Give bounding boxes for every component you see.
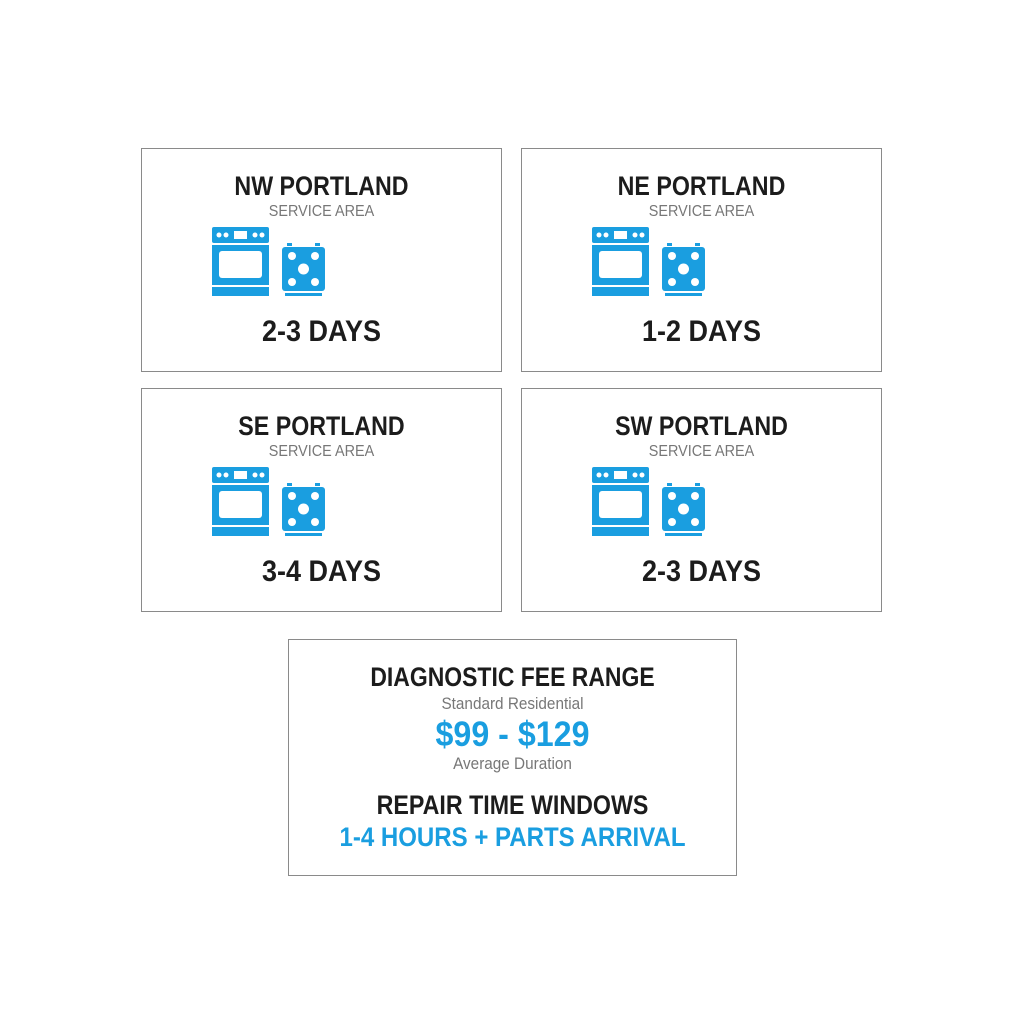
heading: NW PORTLAND (234, 171, 409, 201)
duration label: Average Duration (453, 754, 572, 773)
card: NE Portland (521, 148, 882, 372)
icon: stove and cooktop (212, 467, 325, 536)
card: SE Portland (141, 388, 502, 612)
panel: diagnostic fee (288, 639, 737, 876)
card: NW Portland (141, 148, 502, 372)
duration: 3-4 DAYS (262, 555, 381, 588)
icon: stove and cooktop (592, 467, 705, 536)
repair time value: 1-4 HOURS + PARTS ARRIVAL (339, 822, 686, 852)
card: SW Portland (521, 388, 882, 612)
subtitle: SERVICE AREA (269, 203, 374, 220)
subtitle: SERVICE AREA (269, 443, 374, 460)
fee value: $99 - $129 (436, 715, 589, 754)
heading: SE PORTLAND (238, 411, 405, 441)
duration: 2-3 DAYS (642, 555, 761, 588)
subtitle: SERVICE AREA (649, 443, 754, 460)
icon: stove and cooktop (212, 227, 325, 296)
duration: 1-2 DAYS (642, 315, 761, 348)
subtitle: Standard Residential (441, 694, 584, 713)
subtitle: SERVICE AREA (649, 203, 754, 220)
heading: SW PORTLAND (615, 411, 788, 441)
heading: repair time: REPAIR TIME WINDOWS (377, 790, 648, 820)
duration: 2-3 DAYS (262, 315, 381, 348)
heading: diagnostic fee: DIAGNOSTIC FEE RANGE (370, 662, 655, 692)
icon: stove and cooktop (592, 227, 705, 296)
heading: NE PORTLAND (618, 171, 785, 201)
